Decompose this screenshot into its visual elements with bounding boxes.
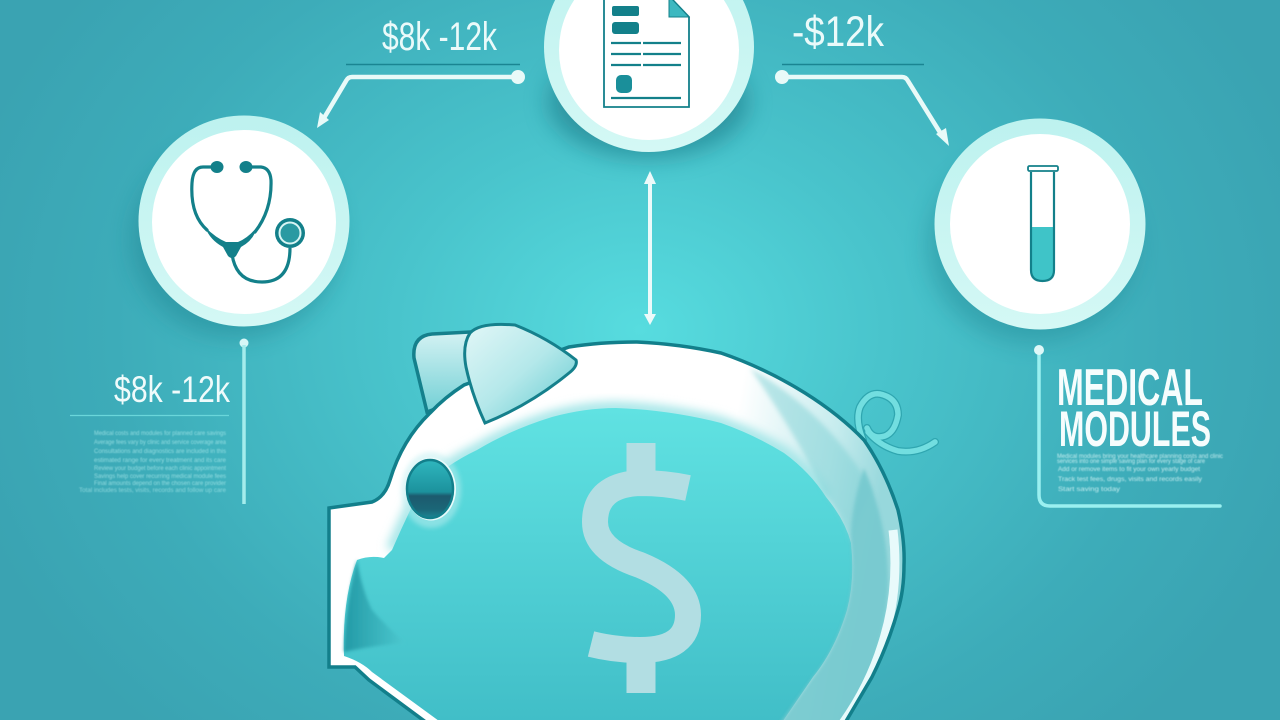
node: test tube circle: [928, 118, 1146, 342]
cost label: left: $8k -12k: [114, 369, 230, 410]
description text: left: [79, 430, 227, 494]
description text: right: services into one simple saving plan for every stage of care: [1057, 458, 1205, 465]
icon: document: [604, 0, 689, 107]
piggy bank: [329, 324, 935, 720]
description text: right: Start saving today: [1058, 486, 1121, 493]
dollar sign: [591, 443, 688, 693]
description text: left: Total includes tests, visits, records and follow up care: [79, 487, 226, 494]
snout shadow: [342, 559, 394, 654]
upper right sheen: [750, 368, 862, 538]
cost label: top right: -$12k: [792, 8, 884, 56]
node: document circle: [544, 0, 754, 158]
description text: left: Consultations and diagnostics are included in this: [94, 448, 227, 455]
right rim refraction: [775, 468, 888, 720]
body outline: [329, 342, 904, 720]
body shell: [329, 342, 904, 720]
inner glass: [344, 408, 852, 720]
description text: right: [1057, 453, 1224, 493]
eye: [401, 452, 461, 528]
connector arrow: to test tube: [775, 70, 949, 146]
icon: stethoscope: [192, 161, 305, 282]
near ear: [465, 324, 576, 423]
tail: [858, 394, 935, 452]
description text: right: Add or remove items to fit your own yearly budget: [1058, 466, 1200, 473]
bracket line: [1039, 350, 1220, 506]
description text: left: Average fees vary by clinic and service coverage area: [94, 439, 226, 446]
connector arrow: to stethoscope: [317, 70, 525, 128]
far ear: [414, 332, 500, 412]
medical modules block: [1034, 345, 1224, 506]
right rim highlight: [838, 530, 895, 720]
description text: left: Medical costs and modules for planned care savings: [94, 430, 227, 437]
description text: right: Medical modules bring your healthcare planning costs and clinic: [1057, 453, 1224, 460]
vertical double arrow: [644, 171, 656, 325]
icon: test tube: [1028, 166, 1058, 281]
description text: left: Final amounts depend on the chosen care provider: [94, 480, 227, 487]
heading: [1057, 359, 1211, 457]
left cost block: [70, 338, 248, 504]
description text: left: estimated range for every treatment and its care: [94, 457, 226, 464]
description text: left: Review your budget before each clinic appointment: [94, 465, 226, 472]
description text: left: Savings help cover recurring medical module fees: [94, 473, 227, 480]
cost label: top left: $8k -12k: [382, 15, 498, 59]
glass edge glow: [392, 408, 826, 550]
description text: right: Track test fees, drugs, visits and records easily: [1058, 476, 1203, 483]
node: stethoscope circle: [132, 116, 350, 338]
